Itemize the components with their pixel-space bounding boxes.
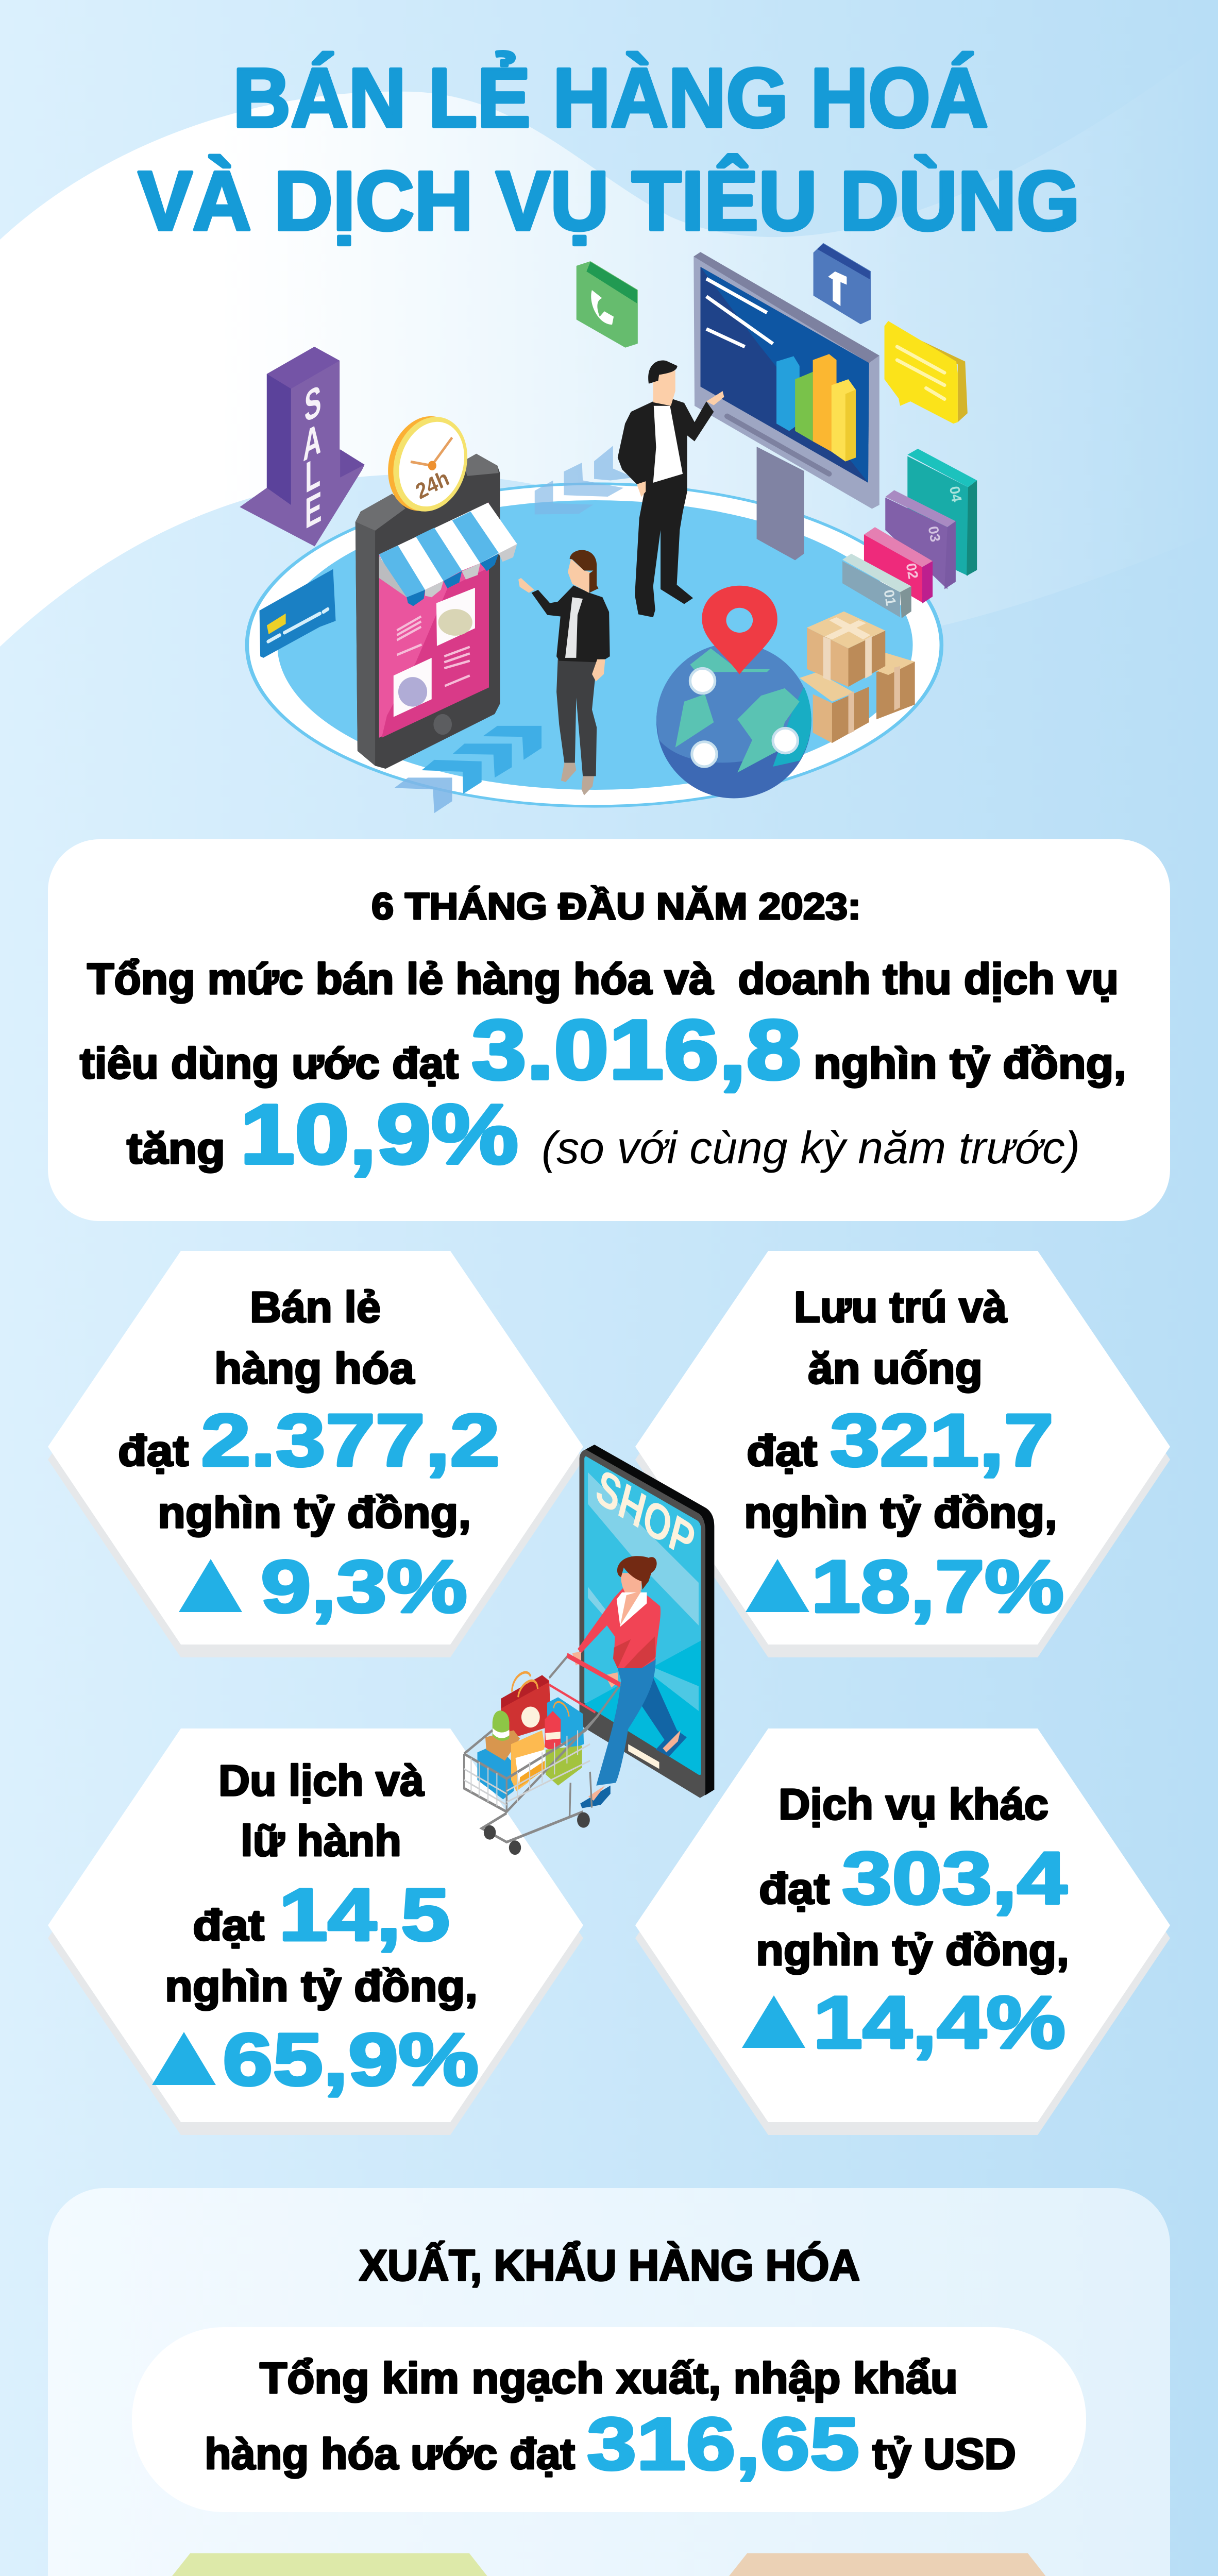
pill: total turnover: 316,65	[587, 2402, 859, 2485]
other app icons	[577, 244, 870, 347]
panel: accommodation hexagon	[635, 1251, 1170, 1657]
icon: location pin	[702, 586, 777, 674]
panel: travel hexagon: 14,5	[279, 1873, 450, 1956]
pill: total turnover: hàng hóa ước đạt	[205, 2430, 575, 2478]
icon: billboard chart	[693, 252, 879, 560]
icon: sale arrow: S	[304, 376, 322, 432]
pill: total turnover	[132, 2327, 1086, 2512]
panel: accommodation hexagon: nghìn tỷ đồng,	[744, 1488, 1057, 1537]
title: VÀ DỊCH VỤ TIÊU DÙNG	[138, 154, 1080, 248]
panel: goods retail hexagon	[48, 1251, 583, 1657]
illustration: shopper with cart leaving phone	[464, 1445, 714, 1855]
panel: accommodation hexagon: 18,7%	[811, 1545, 1064, 1628]
title	[138, 50, 1080, 248]
shopping cart	[464, 1655, 620, 1855]
panel: travel hexagon	[48, 1728, 583, 2135]
panel: other services hexagon: 303,4	[842, 1837, 1067, 1920]
summary text: nghìn tỷ đồng,	[814, 1039, 1126, 1088]
panel heading: 6 THÁNG ĐẦU NĂM 2023:	[371, 886, 861, 927]
icon: numbered steps: 04	[946, 485, 965, 503]
woman	[572, 1556, 687, 1808]
panel: goods retail hexagon: nghìn tỷ đồng,	[158, 1488, 471, 1537]
icon: clock	[375, 402, 481, 525]
icon: clock: 24h	[412, 465, 452, 504]
panel: other services hexagon: đạt	[759, 1865, 830, 1913]
icon: numbered steps: 01	[881, 588, 899, 607]
awning	[379, 503, 517, 606]
title: BÁN LẺ HÀNG HOÁ	[233, 50, 988, 145]
pill: total turnover: tỷ USD	[872, 2430, 1016, 2478]
icon: numbered steps	[842, 449, 977, 618]
summary text: 3.016,8	[471, 1003, 801, 1097]
summary text: tiêu dùng ước đạt	[80, 1039, 459, 1088]
icon: chat bubble	[885, 321, 968, 423]
panel: other services hexagon: Dịch vụ khác	[779, 1780, 1048, 1828]
platform ring	[247, 484, 941, 806]
summary text: tăng	[127, 1124, 225, 1173]
panel: accommodation hexagon: Lưu trú và	[794, 1283, 1007, 1331]
phone	[580, 1445, 714, 1798]
icon: sale arrow	[240, 347, 365, 546]
panel: import export	[48, 2188, 1170, 2576]
panel: accommodation hexagon: 321,7	[830, 1399, 1054, 1482]
icon: smartphone shop	[356, 454, 517, 769]
panel: goods retail hexagon: hàng hóa	[214, 1344, 415, 1393]
panel: travel hexagon: Du lịch và	[218, 1756, 424, 1805]
chevrons top	[535, 446, 634, 514]
panel: retail total	[48, 839, 1170, 1221]
illustration: online retail scene	[240, 244, 977, 813]
chevrons bottom	[394, 726, 542, 813]
panel: goods retail hexagon: 2.377,2	[201, 1399, 500, 1482]
panel: other services hexagon	[635, 1728, 1170, 2135]
icon: numbered steps: 03	[925, 525, 943, 543]
panel: goods retail hexagon: đạt	[118, 1427, 189, 1475]
right half of scene	[618, 252, 977, 798]
background swoosh	[0, 39, 1218, 647]
icon: sale arrow: E	[305, 482, 322, 539]
phone: SHOP	[591, 1458, 700, 1570]
hexagon: import	[607, 2553, 1165, 2576]
icon: up triangle	[742, 1995, 805, 2048]
icon: globe	[656, 643, 811, 798]
panel: travel hexagon: đạt	[193, 1901, 264, 1950]
panel: travel hexagon: lữ hành	[241, 1817, 401, 1865]
icon: up triangle	[152, 2032, 216, 2085]
summary text	[80, 955, 1126, 1181]
panel: travel hexagon: nghìn tỷ đồng,	[165, 1962, 478, 2010]
icon: up triangle	[746, 1559, 809, 1612]
panel: other services hexagon: nghìn tỷ đồng,	[756, 1926, 1069, 1974]
panel: other services hexagon: 14,4%	[813, 1981, 1065, 2064]
summary text: Tổng mức bán lẻ hàng hóa và doanh thu dịch vụ	[87, 955, 1119, 1003]
panel: accommodation hexagon: ăn uống	[808, 1344, 983, 1393]
panel: accommodation hexagon: đạt	[747, 1427, 817, 1475]
icon: sale arrow: A	[303, 414, 322, 471]
panel: goods retail hexagon: Bán lẻ	[250, 1283, 381, 1331]
panel: travel hexagon: 65,9%	[223, 2018, 479, 2101]
pill: total turnover: Tổng kim ngạch xuất, nhập khẩu	[260, 2354, 958, 2402]
icon: phone app	[577, 262, 637, 347]
heading: XUẤT, KHẨU HÀNG HÓA	[359, 2241, 860, 2290]
person: woman	[518, 550, 610, 795]
panel: goods retail hexagon: 9,3%	[261, 1545, 467, 1628]
left half of scene	[240, 347, 634, 813]
person: man in suit	[618, 361, 724, 617]
icon: up triangle	[179, 1559, 242, 1612]
summary text: (so với cùng kỳ năm trước)	[542, 1122, 1080, 1173]
icon: facebook	[814, 244, 870, 324]
icon: numbered steps: 02	[903, 562, 921, 580]
hexagon: export	[50, 2553, 607, 2576]
summary text: 10,9%	[240, 1087, 518, 1181]
icon: sale arrow: L	[305, 447, 320, 503]
icon: credit card	[260, 569, 336, 658]
icon: parcel boxes	[800, 612, 915, 743]
